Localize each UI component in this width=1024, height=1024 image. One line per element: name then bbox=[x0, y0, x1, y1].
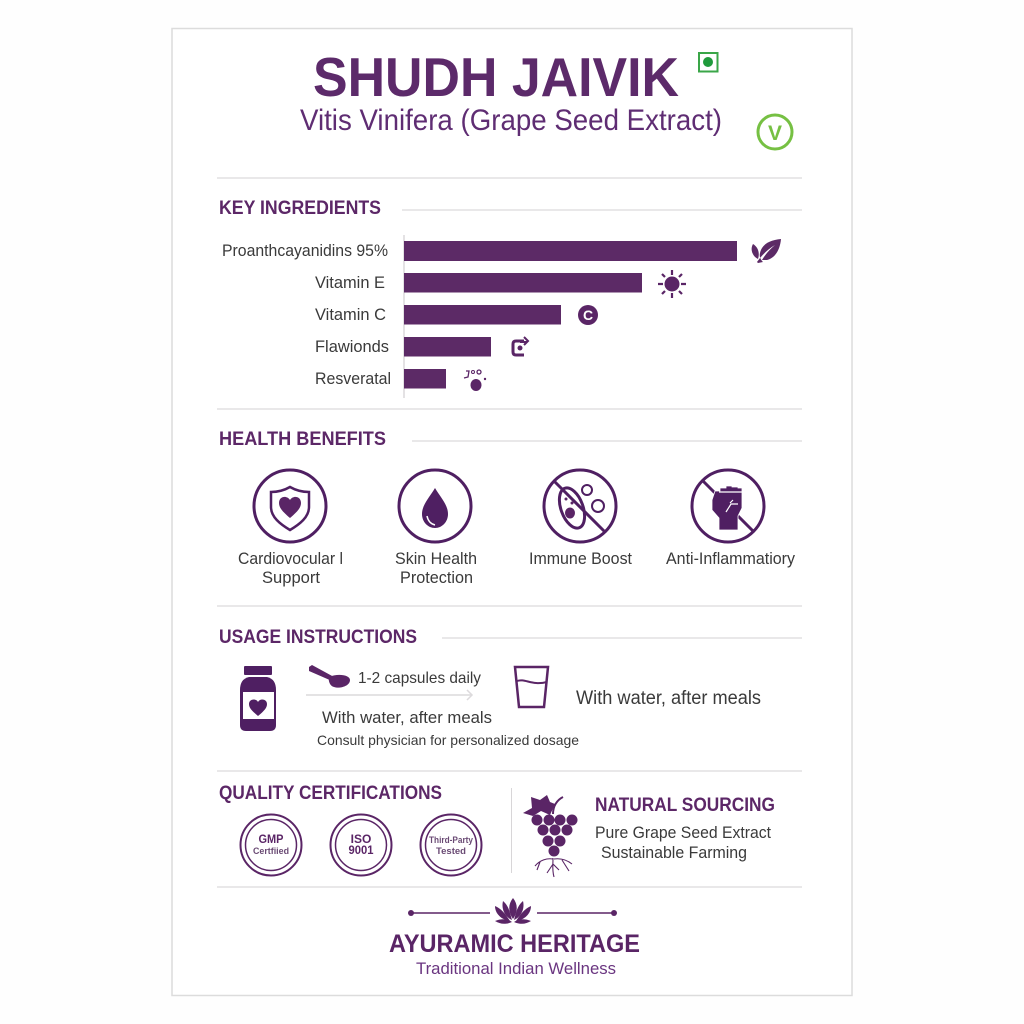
icon: vitamin C: C bbox=[583, 307, 593, 323]
benefit: skin health bbox=[395, 470, 477, 587]
heading: quality certifications: QUALITY CERTIFICATIONS bbox=[219, 783, 442, 804]
text: dosage: 1-2 capsules daily bbox=[358, 670, 481, 687]
icon: flavonoid bbox=[513, 337, 528, 355]
header bbox=[300, 46, 792, 149]
badge: third-party: Third-Party bbox=[429, 835, 474, 846]
text: traditional indian wellness: Traditional Indian Wellness bbox=[416, 959, 616, 978]
benefit: cardiovascular: Cardiovocular l bbox=[238, 549, 343, 568]
benefit: skin health: Skin Health bbox=[395, 549, 477, 568]
bar: Resveratal: Resveratal bbox=[315, 369, 391, 388]
icon: water glass bbox=[515, 667, 548, 707]
icon: resveratrol bbox=[464, 370, 486, 391]
panel: natural sourcing bbox=[523, 795, 775, 877]
badge: GMP bbox=[240, 814, 302, 876]
badge: GMP: GMP bbox=[258, 832, 284, 846]
subtitle: Vitis Vinifera (Grape Seed Extract) bbox=[300, 104, 722, 137]
badge: ISO: ISO bbox=[351, 832, 371, 846]
benefit: cardiovascular bbox=[238, 470, 343, 587]
text: with water right: With water, after meals bbox=[576, 688, 761, 709]
bar: Proanthcayanidins bbox=[222, 241, 737, 261]
badge: ISO: 9001 bbox=[348, 843, 374, 857]
benefit: immune boost: Immune Boost bbox=[529, 549, 632, 568]
icon: grapes bbox=[523, 795, 578, 877]
text: consult physician: Consult physician for personalized dosage bbox=[317, 732, 579, 748]
bar: Flawionds: Flawionds bbox=[315, 337, 389, 356]
bar: Flawionds bbox=[315, 337, 491, 356]
bar: Vitamin C: Vitamin C bbox=[315, 305, 386, 324]
bar: Proanthcayanidins: Proanthcayanidins 95% bbox=[222, 241, 388, 260]
badge: third-party: Tested bbox=[436, 846, 466, 857]
icon: V badge bbox=[758, 115, 792, 149]
bar: Vitamin C bbox=[315, 305, 561, 324]
icon: lotus divider bbox=[408, 898, 617, 924]
bar chart bbox=[222, 235, 737, 398]
benefit: cardiovascular: Support bbox=[262, 568, 320, 587]
heading: usage instructions: USAGE INSTRUCTIONS bbox=[219, 627, 417, 648]
icon: sun bbox=[658, 270, 686, 298]
arrow bbox=[306, 690, 500, 700]
icon: supplement bottle bbox=[240, 666, 276, 731]
text: pure grape seed extract: Pure Grape Seed Extract bbox=[595, 823, 771, 842]
poster card bbox=[172, 28, 852, 996]
bar: Vitamin E bbox=[315, 273, 642, 292]
title: SHUDH JAIVIK bbox=[313, 46, 679, 108]
benefit: skin health: Protection bbox=[400, 568, 473, 587]
bar: Resveratal bbox=[315, 369, 446, 388]
heading: key ingredients: KEY INGREDIENTS bbox=[219, 198, 381, 219]
footer: ayurvedic heritage bbox=[389, 898, 640, 978]
benefit: anti-inflammatory: Anti-Inflammatiory bbox=[666, 549, 795, 568]
benefit: anti-inflammatory bbox=[666, 470, 795, 568]
heading: ayuramic heritage: AYURAMIC HERITAGE bbox=[389, 930, 640, 958]
panel: usage instructions bbox=[219, 627, 802, 748]
icon: V badge: V bbox=[768, 122, 782, 145]
heading: health benefits: HEALTH BENEFITS bbox=[219, 429, 386, 450]
panel: quality certifications bbox=[219, 783, 482, 876]
panel: key ingredients bbox=[219, 198, 802, 398]
badge: third-party bbox=[420, 814, 482, 876]
icon: spoon bbox=[309, 665, 350, 688]
icon: leaf bbox=[752, 239, 781, 263]
bar: Vitamin E: Vitamin E bbox=[315, 273, 385, 292]
benefit: immune boost bbox=[529, 470, 632, 568]
text: sustainable farming: Sustainable Farming bbox=[601, 843, 747, 862]
icon: vitamin C bbox=[578, 305, 598, 325]
icon: vegetarian mark bbox=[699, 53, 718, 72]
text: with water left: With water, after meals bbox=[322, 708, 492, 727]
heading: natural sourcing: NATURAL SOURCING bbox=[595, 795, 775, 816]
badge: GMP: Certfiied bbox=[253, 846, 289, 857]
panel: health benefits bbox=[219, 429, 802, 587]
badge: ISO bbox=[330, 814, 392, 876]
